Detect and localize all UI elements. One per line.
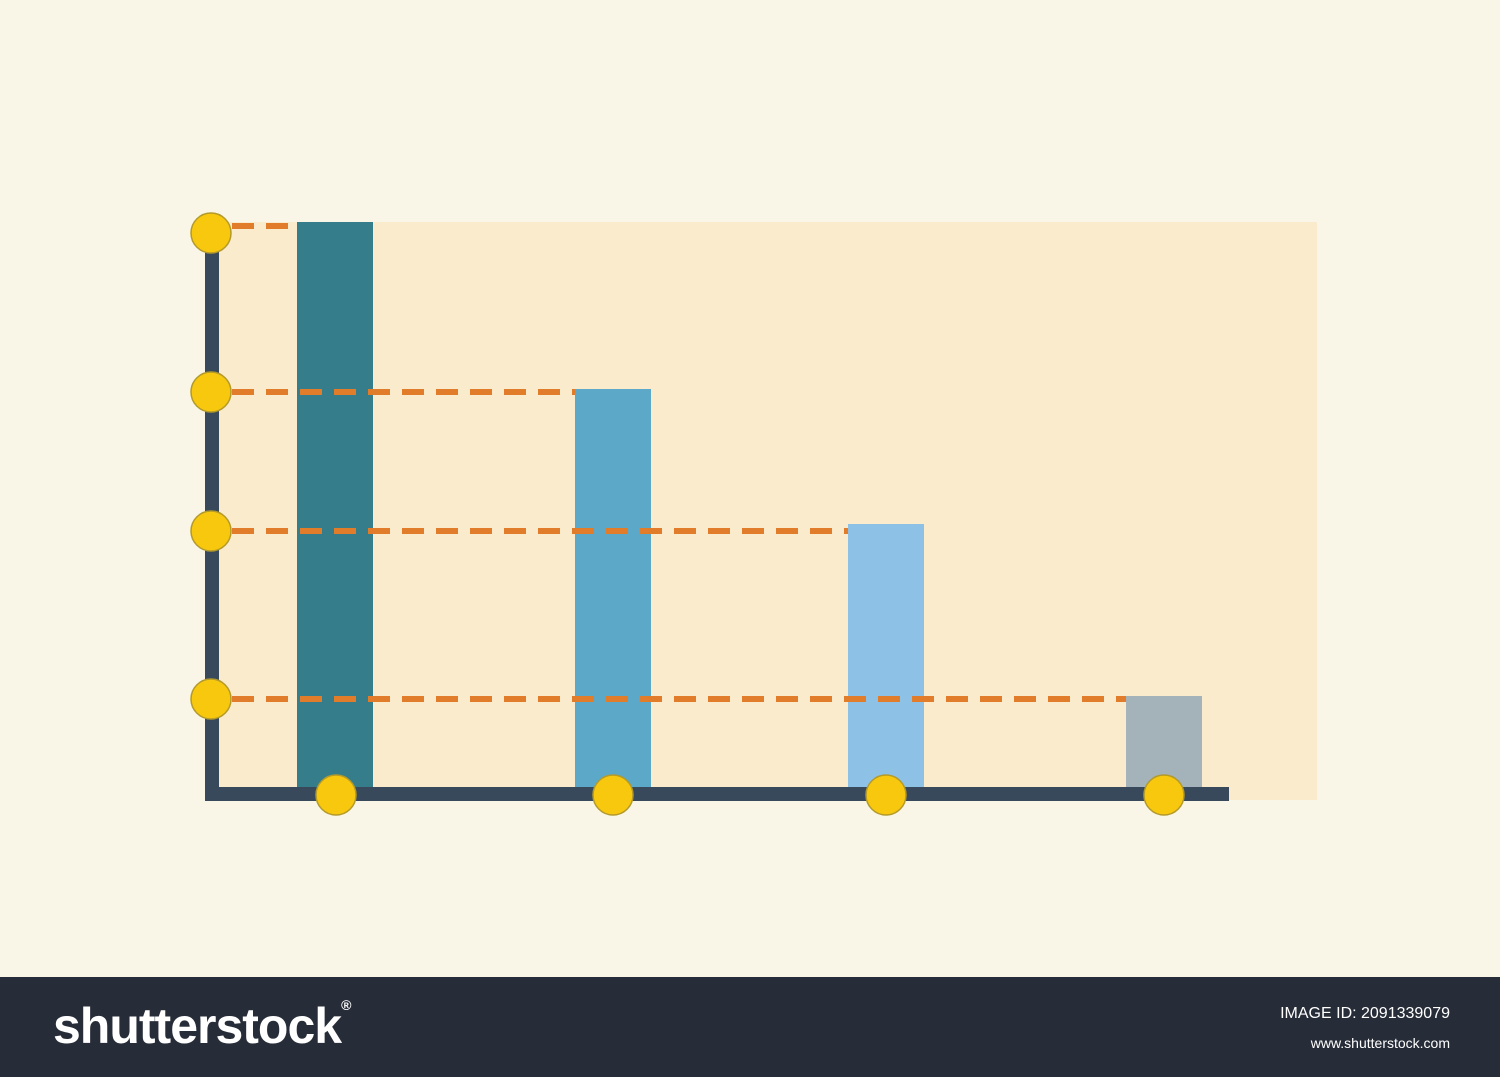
image id: IMAGE ID: 2091339079	[1280, 1005, 1450, 1022]
footer logo: shutterstock®	[53, 997, 350, 1054]
bar 3	[848, 524, 924, 790]
footer	[0, 977, 1500, 1077]
bar 4	[1126, 696, 1202, 790]
dashed guide lines	[232, 226, 1126, 699]
bar 2	[575, 389, 651, 790]
chart panel background	[212, 222, 1317, 800]
x-axis markers	[316, 775, 1184, 815]
y-axis markers	[191, 213, 231, 719]
axes	[205, 233, 1229, 801]
bar 1	[297, 222, 373, 790]
website: www.shutterstock.com	[1311, 1035, 1450, 1051]
